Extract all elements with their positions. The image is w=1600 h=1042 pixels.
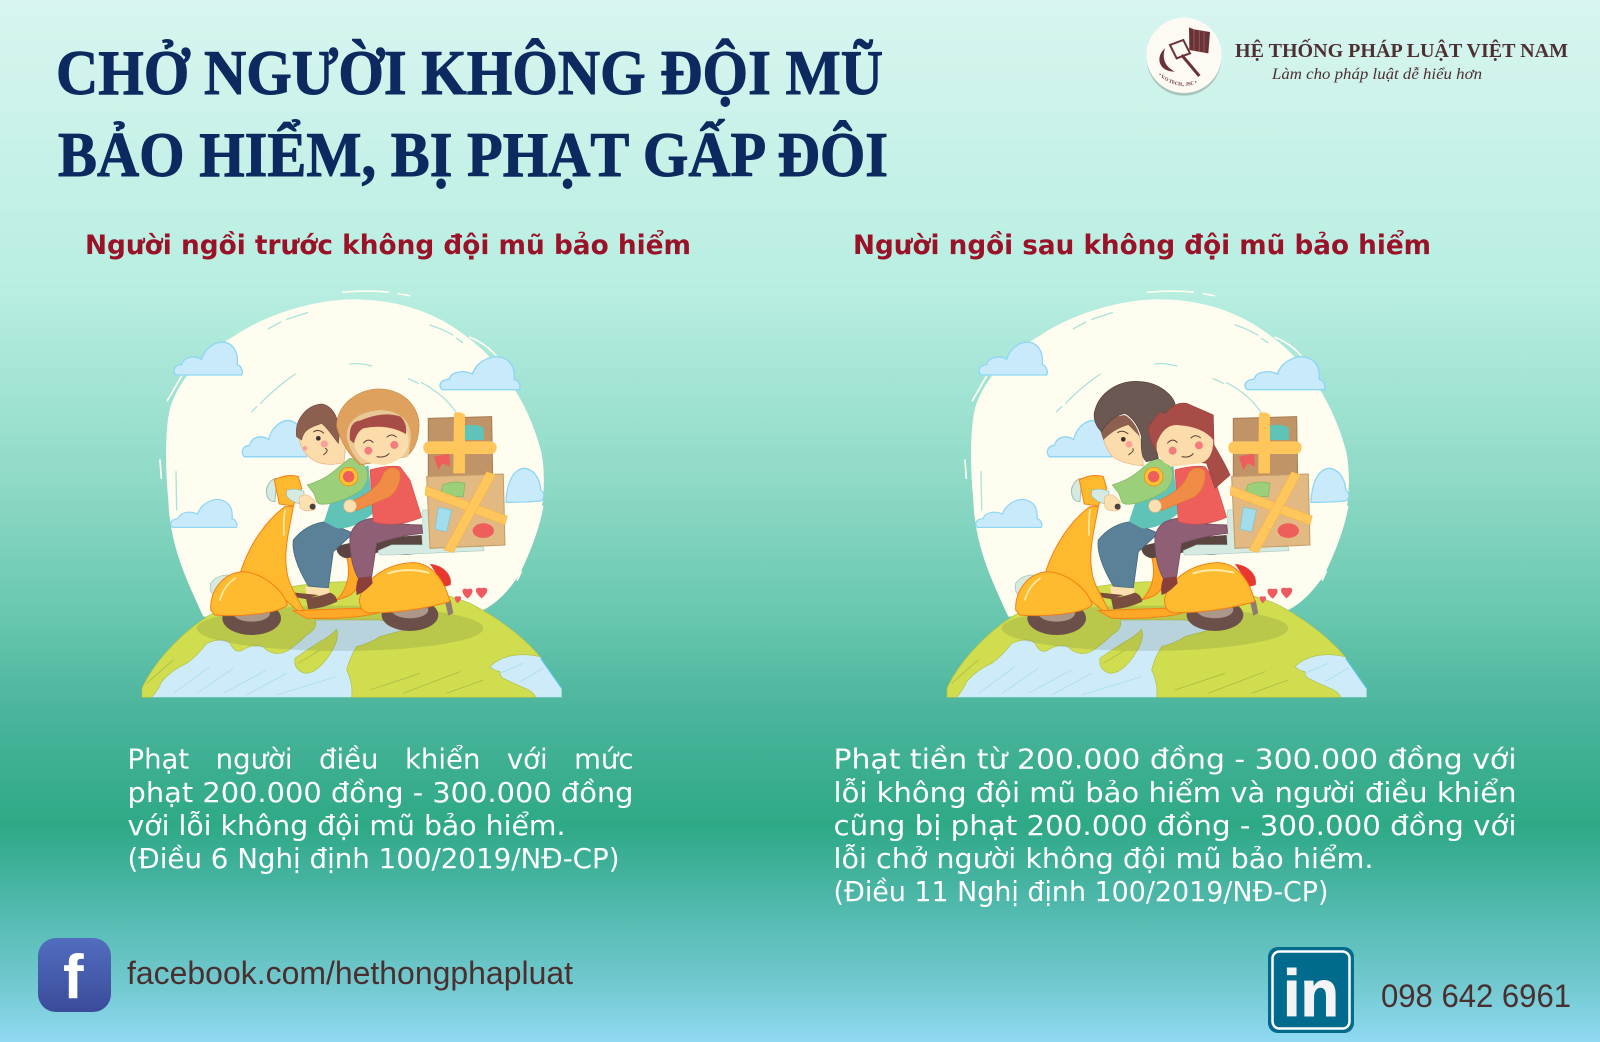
icon: facebook: f — [63, 943, 84, 1012]
text block: left fine: phạt 200.000 đồng - 300.000 đồng — [128, 776, 634, 809]
driver head — [296, 404, 347, 464]
driver head under dark helmet — [1094, 381, 1230, 488]
title: BẢO HIỂM, BỊ PHẠT GẤP ĐÔI — [58, 119, 888, 190]
logo: Hệ thống pháp luật Việt Nam — [1146, 18, 1568, 96]
icon: linkedin — [1268, 947, 1354, 1033]
brand name: HỆ THỐNG PHÁP LUẬT VIỆT NAM — [1235, 38, 1568, 62]
slogan: Làm cho pháp luật dễ hiểu hơn — [1271, 66, 1482, 83]
text block: right fine: Phạt tiền từ 200.000 đồng - 300.000 đồng với — [834, 742, 1516, 776]
title: CHỞ NGƯỜI KHÔNG ĐỘI MŨ — [56, 37, 883, 108]
text block: right fine — [834, 742, 1516, 908]
text block: left fine: (Điều 6 Nghị định 100/2019/NĐ-CP) — [128, 842, 620, 875]
icon: linkedin: in — [1283, 956, 1339, 1030]
icon: gavel and books seal — [1146, 18, 1222, 96]
title — [56, 37, 888, 190]
illustration: driver with helmet, passenger without helmet — [947, 291, 1367, 697]
passenger head — [1148, 403, 1230, 488]
heading: right: Người ngồi sau không đội mũ bảo hiểm — [853, 228, 1431, 261]
text block: left fine: Phạt người điều khiển với mức — [128, 742, 634, 776]
text block: left fine: với lỗi không đội mũ bảo hiểm. — [128, 809, 566, 842]
passenger head with tan helmet — [337, 389, 419, 465]
heading: left: Người ngồi trước không đội mũ bảo hiểm — [85, 228, 691, 261]
text block: right fine: lỗi chở người không đội mũ bảo hiểm. — [834, 842, 1374, 875]
text block: right fine: (Điều 11 Nghị định 100/2019/NĐ-CP) — [834, 875, 1328, 908]
text block: left fine — [128, 742, 634, 875]
icon: facebook — [38, 938, 111, 1012]
text block: right fine: cũng bị phạt 200.000 đồng - 300.000 đồng với — [834, 809, 1516, 842]
illustration: driver without helmet, passenger with helmet — [142, 291, 562, 697]
text block: right fine: lỗi không đội mũ bảo hiểm và người điều khiển — [834, 776, 1516, 809]
phone number: 098 642 6961 — [1381, 978, 1571, 1014]
facebook address: facebook.com/hethongphapluat — [127, 955, 573, 991]
icon: gavel and books seal: • V.O TECH., JSC • — [1159, 74, 1196, 86]
